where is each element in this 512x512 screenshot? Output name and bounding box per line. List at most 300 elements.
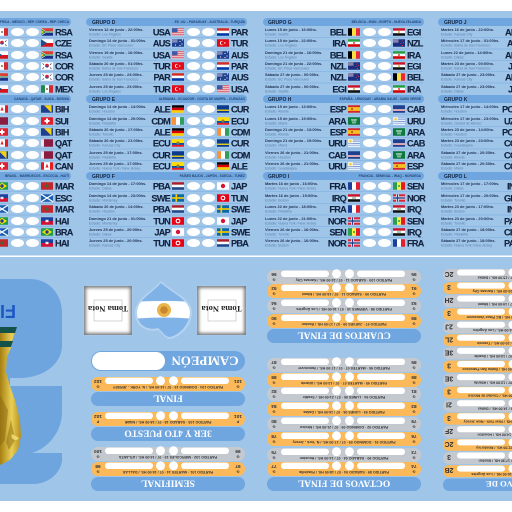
match 75: 2C bbox=[445, 440, 453, 447]
match 99: G bbox=[412, 292, 415, 296]
match 100: PARTIDO 100 · SABADO 11 · 07 / 22:00 HS. / Kansas City bbox=[296, 278, 392, 282]
group D matches: AUS bbox=[153, 38, 171, 48]
match 83: 2L bbox=[444, 335, 453, 342]
group H matches: Viernes 26 de junio - 21:00hs. bbox=[265, 161, 319, 166]
heading: third and fourth place bbox=[91, 427, 245, 441]
note box right: Toma Nota bbox=[87, 304, 128, 314]
match: semifinal 2: PARTIDO 102 · MIERCOLES 15 · 07 / 16:00 HS. / ATLANTA bbox=[119, 455, 217, 459]
group D matches: PAR bbox=[231, 27, 249, 37]
match 73 bbox=[443, 465, 512, 477]
group E matches: Estadio: Nueva York / New Jersey bbox=[89, 166, 140, 170]
group I matches: Lunes 22 de junio - 18:00hs. bbox=[265, 204, 317, 209]
top panel background bbox=[0, 11, 512, 256]
group D matches: TUR bbox=[231, 38, 249, 48]
match 88: 2C bbox=[445, 270, 453, 277]
group G matches: BEL bbox=[330, 27, 347, 37]
match 91: 76 bbox=[411, 433, 417, 439]
group F matches: Estadio: Dallas bbox=[89, 186, 112, 190]
group I matches: Estadio: Boston bbox=[265, 243, 289, 247]
match: third place: P bbox=[96, 420, 99, 424]
heading: round of 16 bbox=[267, 477, 421, 491]
match: semifinal 1: PARTIDO 101 · MARTES 14 · 07 / 16:00 HS. / DALLAS bbox=[122, 470, 213, 474]
match 79: 3 bbox=[447, 388, 451, 395]
group H matches: Estadio: Houston bbox=[265, 155, 291, 159]
group I matches: IRQ bbox=[407, 204, 422, 214]
group E matches: ALE bbox=[231, 161, 248, 171]
group I matches: SEN bbox=[329, 227, 347, 237]
group D matches: Sábado 20 de junio - 01:00hs. bbox=[89, 61, 143, 66]
group G header: GRUPO G bbox=[268, 20, 292, 26]
match 93: PARTIDO 93 · LUNES 06 · 07 / 16:00 HS. / Dallas bbox=[303, 410, 385, 414]
group E matches: Estadio: Houston bbox=[89, 109, 115, 113]
column: groups J, K, L (cropped at right edge) bbox=[438, 18, 512, 248]
group L matches: Sábado 27 de junio - 18:00hs. bbox=[441, 227, 495, 232]
group A matches: MEX bbox=[55, 84, 74, 94]
match 93: 84 bbox=[271, 403, 277, 409]
group C matches: HAI bbox=[55, 238, 69, 248]
match 92: 80 bbox=[271, 418, 277, 424]
group I matches: IRQ bbox=[407, 227, 422, 237]
group L header: GRUPO L bbox=[444, 174, 467, 180]
group F matches: Sábado 20 de junio - 14:00hs. bbox=[89, 204, 143, 209]
match 90: G bbox=[412, 456, 415, 460]
group I matches: NOR bbox=[328, 238, 347, 248]
group G matches: Estadio: Los Ángeles bbox=[265, 55, 297, 59]
group B matches: QAT bbox=[55, 150, 73, 160]
match 91 bbox=[267, 431, 421, 446]
group L matches: Martes 23 de junio - 17:00hs. bbox=[441, 204, 494, 209]
group E matches: Jueves 25 de junio - 17:00hs. bbox=[89, 161, 143, 166]
match 80 bbox=[443, 373, 512, 386]
group B matches: SUI bbox=[55, 116, 68, 126]
group D matches: AUS bbox=[231, 72, 249, 82]
group L matches: Estadio: Toronto bbox=[441, 221, 466, 225]
group H matches: ESP bbox=[330, 127, 347, 137]
group C matches: ESC bbox=[55, 193, 73, 203]
match: semifinal 2 bbox=[91, 446, 245, 461]
group F matches: Estadio: Kansas City bbox=[89, 243, 121, 247]
match: semifinal 1: G bbox=[96, 470, 99, 474]
group H matches: Domingo 21 de junio - 13:00hs. bbox=[265, 127, 322, 132]
match 99: 91 bbox=[411, 285, 417, 291]
group G matches: Estadio: Seattle bbox=[265, 89, 289, 93]
match 90: 73 bbox=[411, 449, 417, 455]
match: semifinal 2: 99 bbox=[235, 448, 241, 454]
group D matches: AUS bbox=[231, 50, 249, 60]
match 96 bbox=[267, 357, 421, 372]
group C matches bbox=[0, 181, 75, 248]
group A matches bbox=[0, 27, 74, 94]
heading: third and fourth place: 3ER Y 4TO PUESTO bbox=[124, 428, 212, 438]
group J matches: Estadio: Bahía de San Francisco bbox=[441, 66, 490, 70]
group E header: ALEMANIA - ECUADOR - COSTA DE MARFIL - CURAZAO bbox=[159, 97, 246, 101]
group G header bbox=[263, 18, 424, 26]
group G matches: Estadio: BC Place Vancouver bbox=[265, 77, 310, 81]
group F matches: TUN bbox=[153, 238, 171, 248]
group D matches: Estadio: BC Place Vancouver bbox=[89, 43, 134, 47]
group E matches: ALE bbox=[154, 104, 171, 114]
group D matches: USA bbox=[153, 50, 171, 60]
match 77: 3 bbox=[447, 414, 451, 421]
match: final: G bbox=[236, 385, 239, 389]
group G matches: IRA bbox=[407, 50, 422, 60]
column: groups D, E, F bbox=[86, 18, 251, 248]
group C matches: MAR bbox=[55, 204, 75, 214]
match 95 bbox=[267, 372, 421, 387]
group E matches: ECU bbox=[153, 138, 171, 148]
match 87: 3 bbox=[447, 283, 451, 290]
group E matches: ALE bbox=[154, 127, 171, 137]
group F matches: JAP bbox=[154, 227, 171, 237]
match: final: 101 bbox=[234, 378, 242, 384]
group I header: GRUPO I bbox=[268, 174, 290, 180]
group C matches: HAI bbox=[55, 216, 69, 226]
match 92: 79 bbox=[411, 418, 417, 424]
match 85: 3 bbox=[447, 309, 451, 316]
match 77 bbox=[443, 412, 512, 425]
match: final bbox=[91, 376, 245, 391]
group F matches: SWE bbox=[231, 204, 250, 214]
group G matches: Estadio: Los Ángeles bbox=[265, 43, 297, 47]
match 87 bbox=[443, 282, 512, 294]
match: third place: P bbox=[236, 420, 239, 424]
group K matches: Sábado 27 de junio - 20:30hs. bbox=[441, 150, 495, 155]
group F matches: PBA bbox=[153, 181, 171, 191]
group G matches: EGI bbox=[332, 84, 346, 94]
group J matches: Lunes 22 de junio - 14:00hs. bbox=[441, 50, 493, 55]
match: semifinal 1: 97 bbox=[235, 463, 241, 469]
match: semifinal 2: G bbox=[96, 455, 99, 459]
group L matches: Estadio: Dallas bbox=[441, 186, 464, 190]
group F matches: Estadio: Monterrey bbox=[89, 198, 118, 202]
match 97: PARTIDO 97 · JUEVES 09 · 07 / 17:00 HS. / Boston bbox=[301, 322, 387, 326]
match 91: G bbox=[412, 440, 415, 444]
group I matches: Lunes 22 de junio - 21:00hs. bbox=[265, 216, 317, 221]
match 85 bbox=[443, 308, 512, 320]
group G matches: Lunes 15 de junio - 16:00hs. bbox=[265, 27, 317, 32]
group H matches: URU bbox=[407, 116, 426, 126]
group H header: ESPAÑA - URUGUAY - ARABIA SAUDÍ - CABO VERDE bbox=[340, 96, 421, 101]
match 99: G bbox=[272, 292, 275, 296]
group F matches: TUN bbox=[231, 193, 249, 203]
match 89: 74 bbox=[411, 463, 417, 469]
group A matches: CZE bbox=[55, 38, 72, 48]
group E header bbox=[86, 95, 247, 103]
match 100: G bbox=[412, 278, 415, 282]
group G matches: BEL bbox=[407, 72, 424, 82]
group F matches: SWE bbox=[151, 193, 171, 203]
group B matches bbox=[0, 104, 74, 171]
group E matches: CDM bbox=[231, 150, 251, 160]
match: semifinal 1 bbox=[91, 461, 245, 476]
group E matches: CUR bbox=[152, 150, 171, 160]
match: final: G bbox=[96, 385, 99, 389]
group H matches: Lunes 15 de junio - 13:00hs. bbox=[265, 104, 317, 109]
match: third place: 102 bbox=[94, 413, 102, 419]
group E matches: CUR bbox=[231, 104, 250, 114]
group H matches: Estadio: Miami bbox=[265, 121, 287, 125]
match 93: 83 bbox=[411, 403, 417, 409]
group F matches: Jueves 25 de junio - 20:00hs. bbox=[89, 238, 143, 243]
group D matches: Domingo 14 de junio - 01:00hs. bbox=[89, 38, 146, 43]
match 98: G bbox=[272, 307, 275, 311]
group F matches: JAP bbox=[231, 216, 247, 226]
group D matches: USA bbox=[153, 27, 171, 37]
group E matches bbox=[89, 104, 251, 171]
group I matches: Martes 16 de junio - 16:00hs. bbox=[265, 181, 318, 186]
group E matches: ECU bbox=[231, 116, 249, 126]
group B header: CANADÁ - QATAR - SUIZA - BOSNIA bbox=[14, 96, 70, 101]
group A matches: COR bbox=[55, 72, 74, 82]
group K matches: Estadio: Miami bbox=[441, 166, 463, 170]
group E header: GRUPO E bbox=[92, 97, 116, 103]
group F matches: Estadio: Houston bbox=[89, 209, 115, 213]
group H matches: Domingo 21 de junio - 19:00hs. bbox=[265, 138, 322, 143]
group F matches: JAP bbox=[231, 181, 247, 191]
match 86: 2H bbox=[445, 296, 453, 303]
group H matches: ARA bbox=[407, 127, 426, 137]
group H header: GRUPO H bbox=[268, 97, 292, 103]
group K matches: Estadio: Houston bbox=[441, 132, 467, 136]
match 84 bbox=[443, 321, 512, 333]
heading: round of 32 bbox=[443, 478, 512, 491]
match 76: 2F bbox=[444, 427, 453, 434]
note box right bbox=[84, 286, 132, 335]
match 97: 89 bbox=[411, 315, 417, 321]
match 94: PARTIDO 94 · LUNES 06 · 07 / 21:00 HS. / Seattle bbox=[303, 395, 385, 399]
match 97: 90 bbox=[271, 315, 277, 321]
group B matches: CAN bbox=[55, 161, 74, 171]
group K matches: Sábado 27 de junio - 20:30hs. bbox=[441, 161, 495, 166]
match 88 bbox=[443, 268, 512, 281]
group F matches bbox=[89, 181, 250, 248]
group B matches: BIH bbox=[55, 104, 70, 114]
champion box: CAMPEÓN bbox=[171, 354, 239, 368]
match: semifinal 2: 100 bbox=[94, 448, 102, 454]
group G matches: Estadio: Seattle bbox=[265, 32, 289, 36]
group J matches: Sábado 27 de junio - 23:00hs. bbox=[441, 72, 495, 77]
group I matches: SEN bbox=[407, 216, 425, 226]
group I matches: Estadio: Boston bbox=[265, 198, 289, 202]
group H matches: CAB bbox=[407, 104, 426, 114]
group K matches: Miércoles 17 de junio - 14:00hs. bbox=[441, 104, 499, 109]
group D matches: PAR bbox=[231, 61, 249, 71]
match 94 bbox=[267, 386, 421, 401]
group G matches bbox=[265, 27, 424, 94]
match 82 bbox=[443, 347, 512, 359]
group J matches: Estadio: Dallas bbox=[441, 89, 464, 93]
match 91: PARTIDO 91 · DOMINGO 05 · 07 / 17:00 HS. / N. York - Jersey bbox=[293, 440, 395, 444]
group I matches: Martes 16 de junio - 19:00hs. bbox=[265, 193, 318, 198]
group K matches: Martes 23 de junio - 23:00hs. bbox=[441, 138, 494, 143]
group L matches bbox=[441, 181, 512, 248]
group I matches: FRA bbox=[329, 181, 347, 191]
match 95: G bbox=[412, 381, 415, 385]
group I matches: Estadio: Nueva York / New Jersey bbox=[265, 186, 316, 190]
match 98: PARTIDO 98 · VIERNES 10 · 07 / 16:00 HS. / Los Ángeles bbox=[296, 307, 392, 312]
group C matches: MAR bbox=[55, 181, 75, 191]
group I matches: FRA bbox=[329, 204, 347, 214]
match 93: G bbox=[412, 410, 415, 414]
group E matches: ECU bbox=[153, 161, 171, 171]
group A matches: COR bbox=[55, 61, 74, 71]
group H matches: ESP bbox=[407, 161, 424, 171]
group H matches: Estadio: Guadalajara bbox=[265, 166, 297, 170]
match 94: 81 bbox=[411, 388, 417, 394]
group I matches: IRQ bbox=[332, 193, 347, 203]
group H matches: Estadio: Atlanta bbox=[265, 109, 289, 113]
group F matches: Estadio: Monterrey bbox=[89, 221, 118, 225]
group I matches: Viernes 26 de junio - 16:00hs. bbox=[265, 238, 319, 243]
group I matches: SEN bbox=[407, 181, 425, 191]
match: third place: PARTIDO 103 · SABADO 18 · 07 / 18:00 HS. / MIAMI bbox=[125, 420, 211, 424]
match 93 bbox=[267, 401, 421, 416]
match 99: PARTIDO 99 · SABADO 11 · 07 / 18:00 HS. / Miami bbox=[302, 292, 386, 296]
group F header: PAÍSES BAJOS - JAPÓN - SUECIA - TÚNEZ bbox=[180, 173, 245, 178]
group D matches bbox=[89, 27, 249, 94]
group L matches: Estadio: Toronto bbox=[441, 198, 466, 202]
group E matches: Estadio: Filadelfia bbox=[89, 121, 116, 125]
match 98: 94 bbox=[271, 300, 277, 306]
group F matches: PBA bbox=[153, 204, 171, 214]
match 96: G bbox=[412, 366, 415, 370]
group L header bbox=[438, 172, 512, 180]
match 100: G bbox=[272, 278, 275, 282]
group I matches: Estadio: Nueva York / New Jersey bbox=[265, 221, 316, 225]
champion box bbox=[91, 351, 245, 371]
match 95: 88 bbox=[271, 374, 277, 380]
group H matches: CAB bbox=[328, 150, 347, 160]
group I matches: FRA bbox=[407, 238, 425, 248]
group D matches: Estadio: Los Ángeles bbox=[89, 32, 121, 36]
group G header: BÉLGICA - IRÁN - EGIPTO - NUEVA ZELANDA bbox=[352, 19, 422, 24]
group G matches: BEL bbox=[330, 50, 347, 60]
group E matches: Sábado 20 de junio - 21:00hs. bbox=[89, 138, 143, 143]
group K header bbox=[438, 95, 512, 103]
match 95: PARTIDO 95 · MARTES 07 · 07 / 13:00 HS. / Atlanta bbox=[300, 381, 387, 385]
match 99 bbox=[267, 283, 421, 298]
match 98: G bbox=[412, 307, 415, 311]
group D matches: Estadio: Los Ángeles bbox=[89, 89, 121, 93]
group E matches: CDM bbox=[231, 127, 251, 137]
note box left: Toma Nota bbox=[201, 304, 242, 314]
match 78 bbox=[443, 399, 512, 412]
group E matches: Jueves 25 de junio - 17:00hs. bbox=[89, 150, 143, 155]
group F header bbox=[86, 172, 247, 180]
group K matches: Estadio: Houston bbox=[441, 109, 467, 113]
match 97: G bbox=[412, 322, 415, 326]
match 90: G bbox=[272, 456, 275, 460]
match 100: 95 bbox=[411, 271, 417, 277]
group L matches: Miércoles 17 de junio - 17:00hs. bbox=[441, 181, 499, 186]
match 96: 85 bbox=[411, 359, 417, 365]
group H header bbox=[263, 95, 424, 103]
match 100: 96 bbox=[271, 271, 277, 277]
heading: semifinal bbox=[91, 477, 245, 491]
match 90: 75 bbox=[271, 449, 277, 455]
match 95: G bbox=[272, 381, 275, 385]
group A matches: RSA bbox=[55, 27, 73, 37]
match: semifinal 1: G bbox=[236, 470, 239, 474]
group G matches: Domingo 21 de junio - 16:00hs. bbox=[265, 50, 322, 55]
match 74: 3 bbox=[447, 453, 451, 460]
match 89 bbox=[267, 461, 421, 476]
group G matches: EGI bbox=[407, 61, 421, 71]
group G matches: NZL bbox=[330, 61, 347, 71]
group J matches: Estadio: Dallas bbox=[441, 55, 464, 59]
group F matches: Domingo 14 de junio - 17:00hs. bbox=[89, 181, 146, 186]
match 92: G bbox=[272, 425, 275, 429]
match 81 bbox=[443, 360, 512, 372]
group J matches: Miércoles 17 de junio - 01:00hs. bbox=[441, 38, 499, 43]
match 84: 2J bbox=[445, 322, 453, 329]
group F header: GRUPO F bbox=[92, 174, 115, 180]
group D header: EE. UU. - PARAGUAY - AUSTRALIA - TURQUÍA bbox=[175, 19, 246, 24]
group B matches: QAT bbox=[55, 138, 73, 148]
group H matches: ESP bbox=[330, 104, 347, 114]
match 79 bbox=[443, 386, 512, 399]
match 100 bbox=[267, 269, 421, 284]
group K matches: Estadio: Guadalajara bbox=[441, 143, 473, 147]
heading: final: FINAL bbox=[153, 393, 183, 403]
match: final: PARTIDO 104 · DOMINGO 19 · 07 / 16:00 HS. / N. YORK - JERSEY bbox=[112, 385, 223, 389]
group D matches: Estadio: Bahía de San Francisco bbox=[89, 66, 138, 70]
match 97 bbox=[267, 313, 421, 328]
group I matches: Estadio: Toronto bbox=[265, 232, 290, 236]
group E matches: Estadio: Kansas City bbox=[89, 143, 121, 147]
group H matches: CAB bbox=[407, 138, 426, 148]
group A matches: RSA bbox=[55, 50, 73, 60]
match 96: 87 bbox=[271, 359, 277, 365]
match 73: 2B bbox=[445, 466, 453, 473]
match 89: 77 bbox=[271, 463, 277, 469]
match 97: G bbox=[272, 322, 275, 326]
match 90 bbox=[267, 447, 421, 462]
group I matches: Viernes 26 de junio - 16:00hs. bbox=[265, 227, 319, 232]
group C matches: BRA bbox=[55, 227, 74, 237]
group D matches: Jueves 25 de junio - 23:00hs. bbox=[89, 84, 143, 89]
group D matches: TUR bbox=[153, 84, 171, 94]
group F matches: SWE bbox=[231, 227, 250, 237]
group D matches: PAR bbox=[154, 72, 171, 82]
match 82: 3E bbox=[444, 348, 453, 355]
match 76 bbox=[443, 425, 512, 438]
match 75 bbox=[443, 438, 512, 451]
group B matches: BIH bbox=[55, 127, 70, 137]
group D header: GRUPO D bbox=[92, 20, 116, 26]
icon: Argentina heart bbox=[135, 281, 192, 339]
group G matches: IRA bbox=[332, 38, 347, 48]
group D matches: Estadio: Bahía de San Francisco bbox=[89, 77, 138, 81]
group E matches: Estadio: Toronto bbox=[89, 132, 114, 136]
group G matches: Estadio: BC Place Vancouver bbox=[265, 66, 310, 70]
group D matches: Jueves 25 de junio - 23:00hs. bbox=[89, 72, 143, 77]
match 89: PARTIDO 89 · SABADO 04 · 07 / 18:00 HS. / Filadelfia bbox=[298, 470, 389, 474]
group D matches: USA bbox=[231, 84, 249, 94]
match 80: 3E bbox=[444, 375, 453, 382]
group H matches: ARA bbox=[407, 150, 426, 160]
group B header bbox=[0, 95, 71, 103]
group I header bbox=[263, 172, 424, 180]
group J matches: Estadio: Bahía de San Francisco bbox=[441, 43, 490, 47]
group J matches: Martes 16 de junio - 22:00hs. bbox=[441, 27, 494, 32]
group A header bbox=[0, 18, 71, 26]
column: groups G, H, I bbox=[263, 18, 426, 248]
group G matches: Domingo 21 de junio - 22:00hs. bbox=[265, 61, 322, 66]
group J matches: Estadio: Kansas City bbox=[441, 32, 473, 36]
match: semifinal 1: 98 bbox=[95, 463, 101, 469]
group K matches bbox=[441, 104, 512, 171]
